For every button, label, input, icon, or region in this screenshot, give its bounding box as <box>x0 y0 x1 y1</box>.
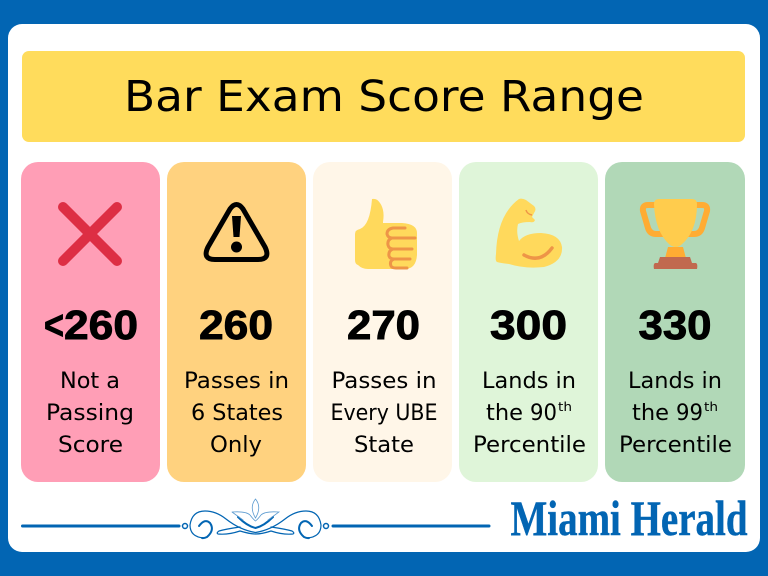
description: Lands in <box>628 369 722 394</box>
panel: 330 <box>605 162 745 482</box>
description <box>473 369 586 458</box>
score: < <box>44 302 64 348</box>
score: 330 <box>638 302 712 348</box>
description: Percentile <box>473 433 586 458</box>
panel: 270 <box>313 162 452 482</box>
score: 270 <box>347 302 420 348</box>
description <box>184 369 289 458</box>
description <box>46 369 134 458</box>
title: Bar Exam Score Range <box>124 72 644 122</box>
score: 260 <box>199 302 273 348</box>
description: Only <box>210 433 262 458</box>
icon: trophy <box>643 199 707 269</box>
description <box>330 369 438 458</box>
description: Not a <box>60 369 120 394</box>
description <box>619 369 732 458</box>
icon: warning triangle <box>206 204 267 260</box>
icon: red cross <box>63 207 117 261</box>
ornamental divider <box>22 499 489 538</box>
score: 300 <box>490 302 567 348</box>
description: 90 <box>530 401 557 426</box>
score: 260 <box>64 302 138 348</box>
description: Passes in <box>332 369 436 394</box>
panel: 300 <box>459 162 598 482</box>
description: Lands in <box>482 369 576 394</box>
description: th <box>558 400 572 414</box>
panel: below 260 <box>21 162 160 482</box>
description: th <box>704 400 718 414</box>
description: Percentile <box>619 433 732 458</box>
description: 99 <box>676 401 703 426</box>
description: 6 States <box>191 401 283 426</box>
description: Passes in <box>184 369 289 394</box>
description: Score <box>58 433 123 458</box>
description: Passing <box>46 401 134 426</box>
title banner <box>22 51 745 142</box>
panel: 260 <box>167 162 306 482</box>
icon: thumbs up <box>355 199 417 269</box>
description: Every UBE <box>330 401 438 426</box>
description: the <box>486 401 523 426</box>
description: the <box>632 401 669 426</box>
icon: flexed biceps <box>496 199 562 268</box>
description: State <box>354 433 414 458</box>
